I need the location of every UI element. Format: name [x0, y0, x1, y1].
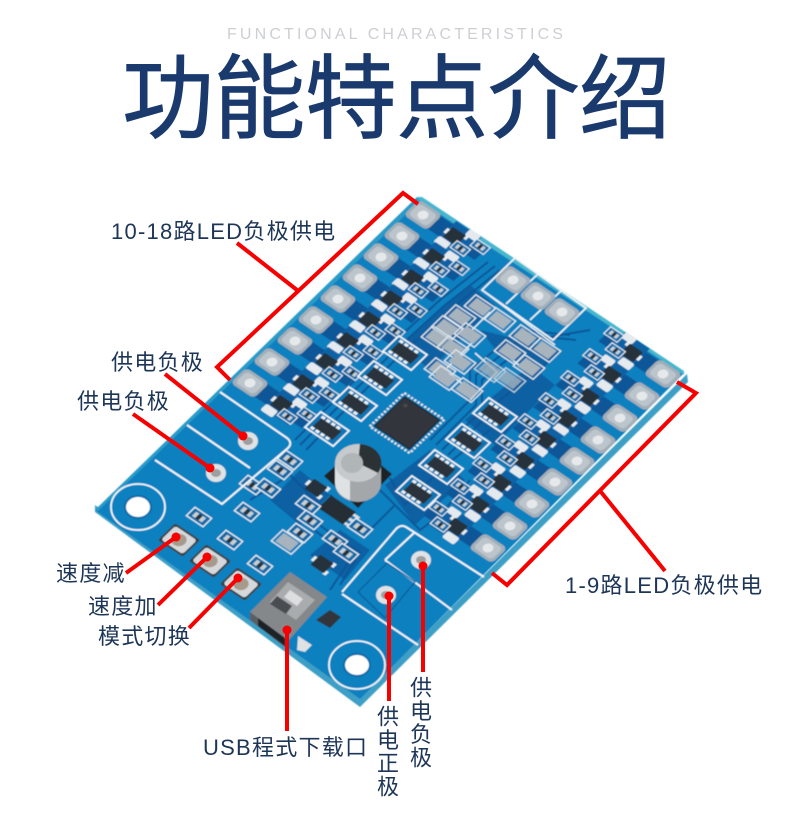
capacitor — [324, 444, 392, 508]
label: outputs 10 to 18: 10-18路LED负极供电 — [111, 219, 336, 244]
leader: usb — [282, 626, 292, 731]
label: lower negative terminal: 供电负极 — [77, 389, 170, 414]
channel row: outputs 10 to 18 — [226, 197, 494, 435]
label: negative supply: 供电负极 — [407, 676, 432, 770]
microcontroller chip — [370, 393, 444, 453]
title: 功能特点介绍 — [122, 49, 670, 151]
label: positive supply: 供电正极 — [374, 705, 399, 799]
leader: negative supply — [418, 562, 428, 672]
subtitle: FUNCTIONAL CHARACTERISTICS — [227, 26, 566, 43]
power pad outline lower right — [342, 526, 484, 645]
board edge thickness — [95, 374, 688, 707]
power terminals B A GND — [482, 258, 586, 340]
label: speed up: 速度加 — [88, 594, 158, 619]
resistor networks — [305, 336, 517, 510]
board surface — [95, 197, 684, 699]
leader: upper negative terminal — [165, 374, 248, 440]
power pad outline upper left — [155, 392, 290, 504]
bracket: outputs 1 to 9 — [492, 382, 696, 585]
label: upper negative terminal: 供电负极 — [111, 350, 204, 375]
leader: lower negative terminal — [133, 414, 214, 472]
regulator and small parts — [186, 450, 373, 576]
small components right centre — [421, 290, 561, 402]
label: mode switch: 模式切换 — [98, 624, 191, 649]
label: outputs 1 to 9: 1-9路LED负极供电 — [565, 573, 763, 598]
leader: mode switch — [189, 574, 242, 628]
copper traces — [270, 285, 560, 580]
leader: speed up — [158, 552, 212, 605]
bracket: outputs 10 to 18 — [217, 193, 418, 380]
channel row: outputs 1 to 9 — [416, 324, 685, 568]
leader: speed down — [126, 532, 180, 573]
leader: positive supply — [384, 592, 394, 701]
label: speed down: 速度减 — [56, 561, 126, 586]
mini USB connector — [250, 572, 341, 652]
power pads lower right — [376, 551, 431, 604]
tact switches — [158, 523, 262, 601]
mounting holes — [111, 484, 385, 689]
label: usb download: USB程式下载口 — [203, 735, 368, 760]
power pads upper left — [206, 432, 258, 482]
